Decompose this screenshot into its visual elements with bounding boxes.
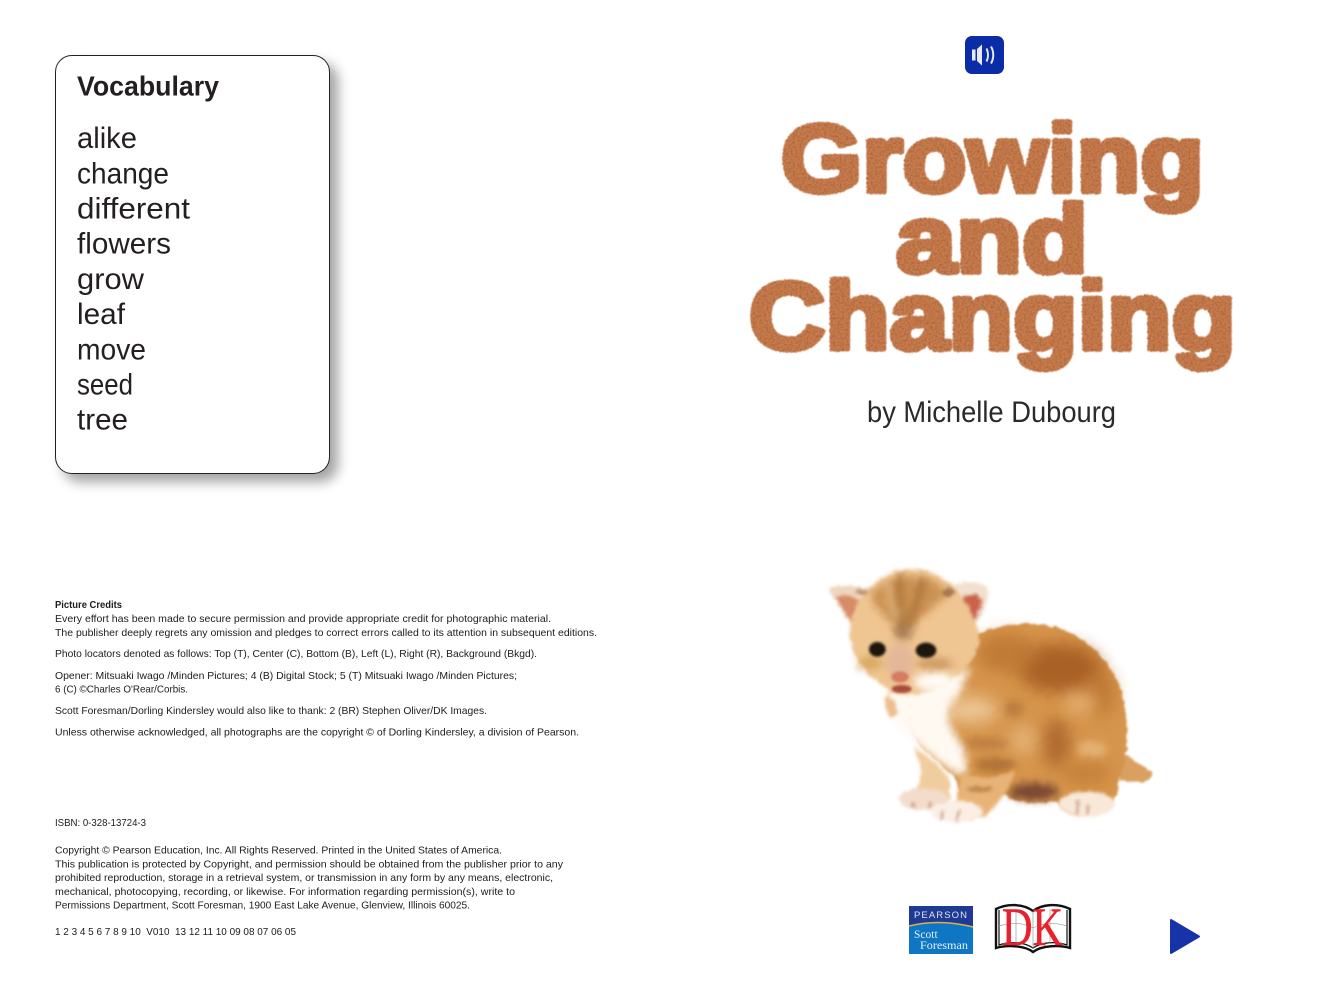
text block: isbn and copyright: Permissions Department, Scott Foresman, 1900 East Lake Avenue, Glenview, Illinois 60025. — [55, 900, 470, 912]
word: seed: seed — [77, 368, 133, 402]
orange bib stripe — [882, 694, 900, 719]
word: tree: tree — [77, 404, 128, 436]
body markings — [942, 633, 1115, 800]
text block: picture credits: 6 (C) ©Charles O'Rear/Corbis. — [55, 684, 188, 696]
word: different: different — [77, 192, 191, 226]
panel: vocabulary — [55, 55, 330, 474]
text block: picture credits: Opener: Mitsuaki Iwago /Minden Pictures; 4 (B) Digital Stock; 5 (T) Mitsuaki Iwago /Minden Pictures; — [55, 671, 517, 682]
text block: isbn and copyright — [55, 818, 564, 938]
text block: picture credits: Scott Foresman/Dorling Kindersley would also like to thank: 2 (BR) Stephen Oliver/DK Images. — [55, 706, 487, 717]
text block: isbn and copyright: Copyright © Pearson Education, Inc. All Rights Reserved. Printed in the United States of America. — [55, 846, 502, 856]
nose and mouth — [891, 671, 912, 693]
word: change: change — [77, 158, 169, 190]
logo: Pearson Scott Foresman: Scott — [914, 929, 938, 941]
text block: isbn and copyright: prohibited reproduction, storage in a retrieval system, or transmission in any form by any means, electronic, — [55, 873, 553, 884]
text block: picture credits: The publisher deeply regrets any omission and pledges to correct errors called to its attention in subsequent editions. — [55, 628, 597, 639]
word: alike: alike — [77, 122, 137, 155]
heading: Vocabulary: Vocabulary — [77, 70, 219, 102]
title line: Growing: Growing — [781, 106, 1204, 212]
logo: Pearson Scott Foresman: PEARSON — [914, 910, 967, 921]
logo: DK open book: DK — [1002, 897, 1063, 957]
icon: speaker audio button — [965, 36, 1004, 74]
word: grow: grow — [77, 263, 144, 296]
eyes — [869, 642, 936, 658]
logo: Pearson Scott Foresman: Foresman — [920, 940, 968, 952]
head — [829, 569, 988, 694]
text block: picture credits — [55, 600, 597, 738]
title: Growing and Changing — [749, 106, 1236, 374]
text block: isbn and copyright: This publication is protected by Copyright, and permission should be obtained from the publisher prior to any — [55, 860, 564, 870]
title line: and: and — [896, 186, 1088, 293]
kitten body — [887, 624, 1152, 822]
logo: Pearson Scott Foresman — [908, 906, 974, 954]
text block: isbn and copyright: ISBN: 0-328-13724-3 — [55, 818, 146, 829]
photo: kitten — [828, 566, 1154, 824]
text block: isbn and copyright: 1 2 3 4 5 6 7 8 9 10 V010 13 12 11 10 09 08 07 06 05 — [55, 927, 296, 938]
text block: picture credits: Unless otherwise acknowledged, all photographs are the copyright © of Dorling Kindersley, a division of Pearson. — [55, 728, 579, 738]
legs and paws — [899, 747, 1115, 823]
word: leaf: leaf — [77, 298, 126, 331]
word: flowers: flowers — [77, 228, 171, 260]
text block: picture credits: Photo locators denoted as follows: Top (T), Center (C), Bottom (B), Left (L), Right (R), Background (Bkgd). — [55, 649, 537, 660]
byline: by Michelle Dubourg — [867, 396, 1116, 429]
arrow: next page — [1170, 919, 1200, 954]
vocabulary word list — [77, 70, 219, 436]
word: move: move — [77, 334, 146, 366]
text block: isbn and copyright: mechanical, photocopying, recording, or likewise. For information regarding permission(s), write to — [55, 887, 515, 898]
title line: Changing: Changing — [749, 263, 1236, 370]
text block: picture credits: Picture Credits — [55, 600, 122, 611]
text block: picture credits: Every effort has been made to secure permission and provide appropriate credit for photographic material. — [55, 614, 551, 625]
white chest — [882, 667, 970, 777]
